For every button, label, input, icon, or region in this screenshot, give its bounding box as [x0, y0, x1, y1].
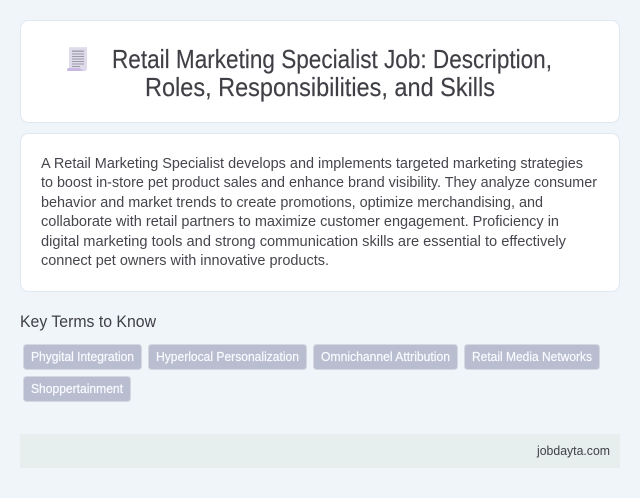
description text: connect pet owners with innovative products. — [41, 252, 329, 269]
title: Roles, Responsibilities, and Skills — [145, 72, 495, 102]
key term chips — [24, 344, 600, 402]
description text: collaborate with retail partners to maximize customer engagement. Proficiency in — [41, 213, 559, 230]
chip: Shoppertainment — [24, 376, 130, 402]
chip: Omnichannel Attribution: Omnichannel Attribution — [321, 350, 450, 364]
chip: Phygital Integration: Phygital Integration — [31, 350, 134, 364]
panel: description card — [20, 134, 620, 292]
description text: digital marketing tools and strong communication skills are essential to effectively — [41, 233, 566, 250]
icon: receipt document — [67, 47, 87, 71]
chip: Phygital Integration — [24, 344, 142, 370]
description text: to boost in-store pet product sales and enhance brand visibility. They analyze consumer — [41, 174, 597, 191]
description text — [41, 155, 597, 269]
chip: Retail Media Networks: Retail Media Networks — [472, 350, 592, 364]
footer source text: jobdayta.com — [536, 444, 610, 458]
title: Retail Marketing Specialist Job: Description, — [112, 44, 552, 74]
title — [112, 44, 552, 102]
description text: A Retail Marketing Specialist develops and implements targeted marketing strategies — [41, 155, 583, 172]
chip: Hyperlocal Personalization — [148, 344, 306, 370]
chip: Shoppertainment: Shoppertainment — [31, 382, 124, 396]
chip: Retail Media Networks — [464, 344, 600, 370]
chip: Hyperlocal Personalization: Hyperlocal Personalization — [156, 350, 299, 364]
panel: title card — [20, 20, 620, 122]
description text: behavior and market trends to create promotions, optimize merchandising, and — [41, 194, 543, 211]
heading: key terms: Key Terms to Know — [20, 313, 156, 331]
footer bar — [20, 434, 620, 468]
chip: Omnichannel Attribution — [314, 344, 458, 370]
